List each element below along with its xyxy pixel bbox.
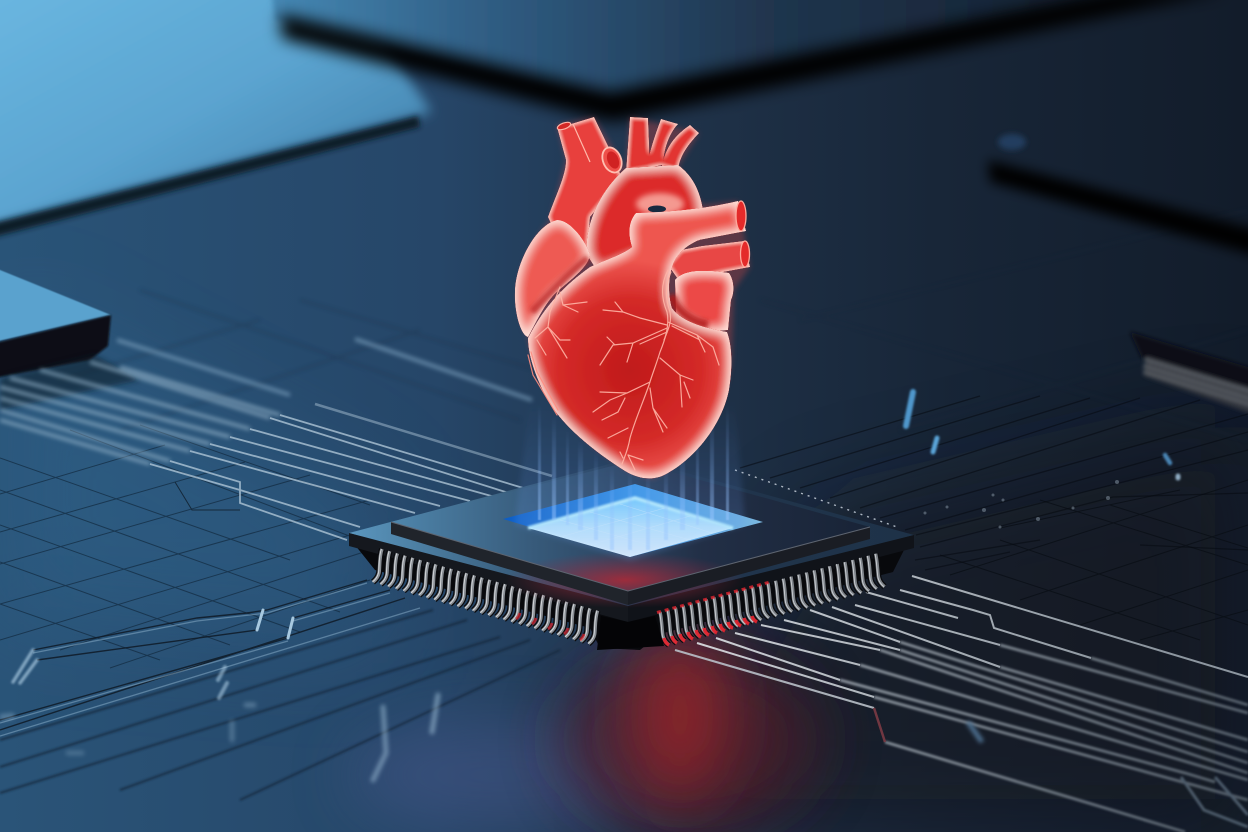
vena cava ring bbox=[556, 121, 625, 175]
lower pulmonary tube bbox=[668, 241, 750, 282]
right circuit traces: far bbox=[840, 642, 1248, 832]
heart outer glow bbox=[518, 117, 750, 479]
chip base bbox=[349, 458, 914, 622]
perspective tile grid: right bbox=[940, 480, 1248, 640]
vena cava tubes bbox=[548, 117, 622, 253]
blurred panel: top-center bbox=[270, 0, 1230, 122]
chip bbox=[349, 458, 914, 650]
blue smudge on right traces bbox=[968, 722, 982, 742]
branch dark trace bbox=[175, 482, 240, 510]
hologram light rays bbox=[515, 400, 745, 560]
left atrium bbox=[515, 220, 590, 337]
left atrium crease bbox=[532, 258, 588, 312]
right connector fragment bbox=[1130, 332, 1248, 416]
coronary vessels bbox=[528, 270, 719, 470]
small glowing trace accents bbox=[906, 392, 1178, 478]
right circuit traces: near bbox=[675, 576, 1248, 742]
aortic arch bbox=[587, 165, 703, 272]
left circuit traces: near part bbox=[150, 404, 552, 540]
arch opening with pale halo bbox=[636, 193, 684, 215]
lower-left highlight traces bbox=[0, 583, 420, 736]
blurred panel: top-left bbox=[0, 0, 432, 238]
vena cava tube divider bbox=[573, 124, 590, 162]
perspective tile grid: left bbox=[0, 425, 400, 668]
right auricle crease bbox=[672, 295, 708, 325]
lower-left fading circuit traces bbox=[0, 610, 560, 800]
blurred panel: right edge shadow bbox=[988, 134, 1248, 256]
pulmonary tube opening bbox=[736, 201, 746, 231]
far blurred circuit traces bbox=[117, 339, 532, 400]
lower-left dark circuit traces bbox=[0, 580, 405, 730]
left pins bbox=[372, 549, 598, 644]
lower-left glowing trace segments bbox=[2, 610, 438, 780]
perspective tile grid: far bbox=[60, 210, 1248, 440]
upper-right dark circuit traces bbox=[740, 396, 1248, 570]
right pins bbox=[516, 554, 885, 645]
glowing chip window bbox=[503, 484, 763, 557]
right auricle bbox=[675, 271, 733, 332]
small glowing dots on upper-right traces bbox=[924, 480, 1119, 528]
aortic branches bbox=[626, 117, 699, 172]
lower pulmonary tube opening bbox=[740, 241, 750, 267]
left chip fragment bbox=[0, 268, 140, 410]
chip body shadow bbox=[355, 545, 905, 650]
ventricles and pulmonary trunk bbox=[528, 201, 746, 478]
dotted trace bbox=[735, 470, 897, 527]
left circuit traces: blurred far part bbox=[0, 362, 280, 464]
heart bbox=[515, 117, 750, 479]
chip top plate bbox=[391, 461, 870, 608]
black gap below chip corner bbox=[597, 616, 664, 650]
